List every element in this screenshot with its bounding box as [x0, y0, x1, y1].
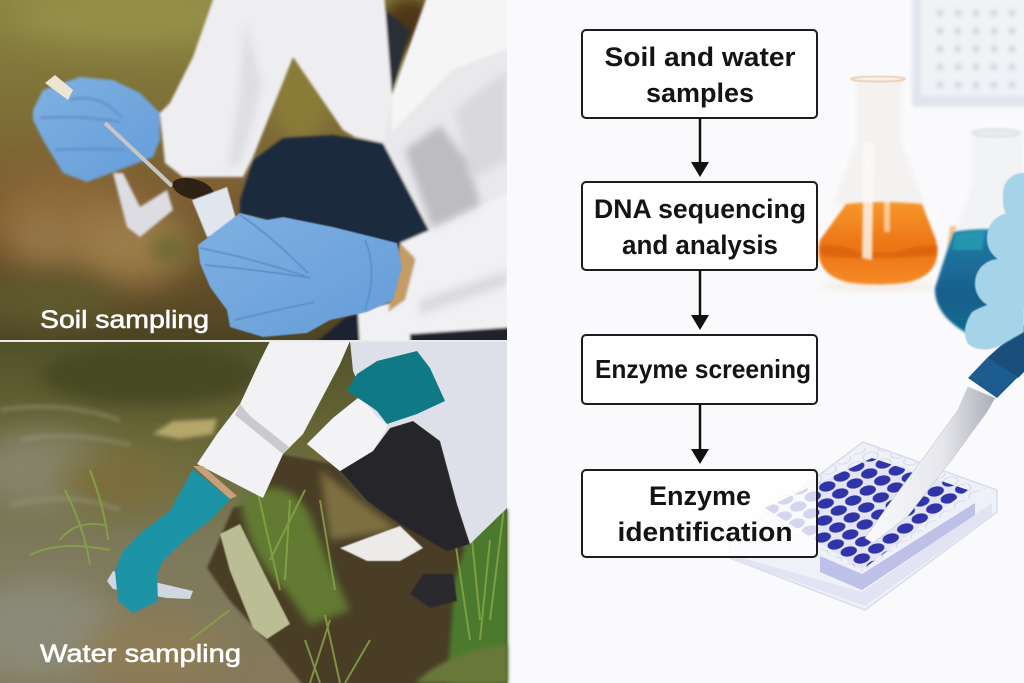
blurred well plate at top right: [912, 0, 1024, 107]
wrist: [388, 243, 415, 312]
plate body: [730, 442, 997, 610]
arrow 2: [691, 270, 709, 330]
dark lower trousers: [317, 314, 361, 340]
pipette body: [987, 325, 1024, 378]
muddy bank: [207, 454, 507, 683]
grass clump: [30, 470, 507, 683]
lower teal glove: [115, 469, 230, 613]
trousers: [340, 421, 470, 551]
sampling tube: [107, 571, 193, 599]
box: enzyme screening: [582, 335, 817, 404]
upper teal glove: [347, 351, 445, 424]
sample jar: [220, 524, 290, 639]
box: enzyme screening: Enzyme screening: [595, 354, 811, 384]
blue flask: [935, 129, 1024, 335]
wells: [765, 458, 968, 570]
arrow 3: [691, 404, 709, 464]
lab coat body: [382, 46, 507, 232]
caption: soil sampling: Soil sampling: [40, 306, 209, 334]
sample tube: [192, 187, 240, 237]
box: soil and water samples: Soil and water: [604, 42, 796, 72]
side face: [735, 503, 992, 606]
lab coat sleeve: [160, 0, 392, 177]
soil photo background: [0, 0, 428, 340]
box: enzyme identification: identification: [618, 517, 792, 547]
pipette tip: [865, 387, 995, 543]
pipette collar: [968, 358, 1018, 398]
glove fingers: [965, 173, 1024, 350]
box: DNA sequencing and analysis: DNA sequencing: [594, 194, 806, 224]
right lab background: [507, 0, 1024, 683]
black shoe: [410, 574, 457, 608]
box: DNA sequencing and analysis: [582, 182, 817, 270]
box: soil and water samples: samples: [646, 78, 754, 108]
lab coat sleeve: [197, 341, 350, 498]
box: enzyme identification: [582, 470, 817, 557]
wrist: [193, 466, 237, 499]
coat shading: [228, 20, 507, 315]
empty wells row: [752, 445, 985, 572]
panel: soil sampling photo: [0, 0, 530, 360]
microplate: [730, 442, 997, 610]
orange flask: [818, 76, 938, 291]
divider between photos: [0, 340, 507, 342]
cuff fold: [235, 404, 289, 454]
caption: water sampling: Water sampling: [40, 640, 241, 668]
panel: water sampling photo: [0, 341, 507, 683]
water background: [0, 342, 507, 683]
lower blue glove: [198, 213, 402, 337]
lab coat lower sleeve: [355, 196, 507, 340]
upper blue glove: [33, 77, 160, 182]
box: enzyme identification: Enzyme: [649, 481, 751, 511]
box: soil and water samples: [582, 30, 817, 118]
sandy patch: [153, 419, 217, 439]
flowchart: [582, 30, 817, 557]
gloved hand with pipette: [965, 173, 1024, 398]
lab coat body: [307, 341, 507, 544]
dark trousers: [240, 135, 440, 250]
spoon: [45, 75, 216, 204]
box: DNA sequencing and analysis: and analysis: [622, 230, 778, 260]
cuff strap: [113, 173, 173, 237]
white boot: [340, 526, 423, 561]
dark shirt: [385, 10, 410, 95]
arrow 1: [691, 118, 709, 177]
